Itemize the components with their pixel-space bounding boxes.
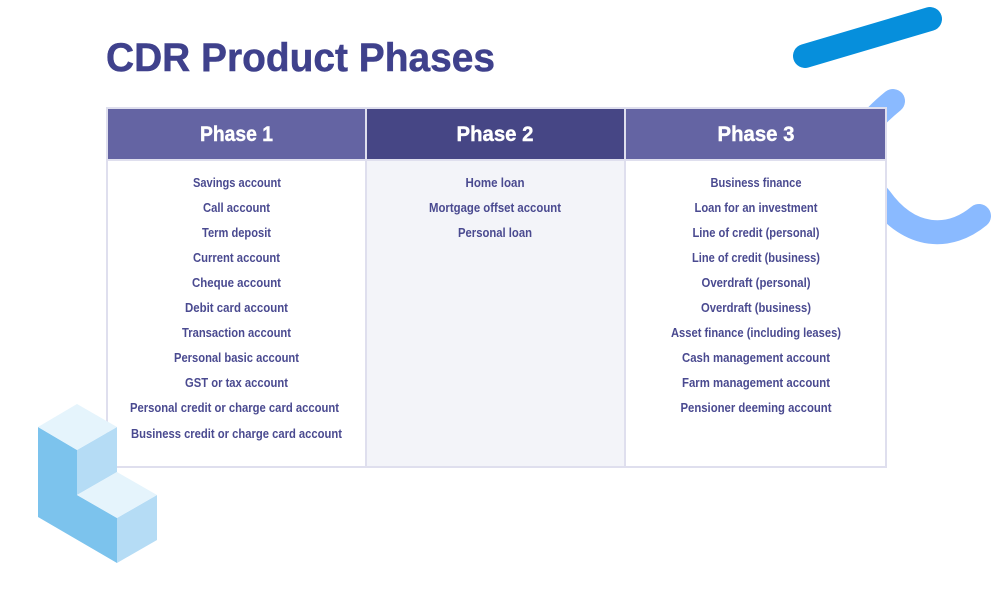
phase 3 product list: Line of credit (business) [692, 251, 820, 265]
phase 3 product list: Overdraft (business) [701, 301, 811, 315]
phase 3 product list: Pensioner deeming account [680, 401, 832, 415]
phase 3 product list: Asset finance (including leases) [671, 326, 841, 340]
panel: phase 2 column [366, 108, 625, 467]
phase 2 header [366, 108, 625, 160]
phase 1 product list: Savings account [193, 176, 282, 190]
phase 1 product list: Current account [193, 251, 281, 265]
phase 1 header [107, 108, 366, 160]
phase 1 product list: Cheque account [192, 276, 282, 290]
phase 2 product list: Mortgage offset account [429, 201, 562, 215]
phase 2 product list [429, 176, 562, 240]
phase 3 product list [671, 176, 841, 415]
decoration: light blue curved stroke behind table [857, 101, 979, 232]
phase 2 product list: Personal loan [458, 226, 532, 240]
phase 3 product list: Cash management account [682, 351, 831, 365]
table grid lines [107, 108, 886, 467]
phase 1 product list: Personal credit or charge card account [130, 401, 340, 415]
phase 1 product list: Debit card account [185, 301, 289, 315]
phase 1 header: Phase 1 [200, 123, 273, 146]
phase 3 product list: Line of credit (personal) [692, 226, 820, 240]
phase 1 product list: Term deposit [202, 226, 272, 240]
phase 3 header: Phase 3 [718, 123, 794, 146]
table [107, 108, 886, 467]
phase 3 product list: Business finance [710, 176, 802, 190]
phase 1 product list: Call account [203, 201, 271, 215]
phase 3 product list: Loan for an investment [694, 201, 818, 215]
phase 1 product list: GST or tax account [185, 376, 289, 390]
phase 1 product list: Business credit or charge card account [131, 427, 343, 441]
phase 1 product list: Transaction account [182, 326, 292, 340]
phase 3 header [625, 108, 886, 160]
phase 1 product list [130, 176, 343, 441]
decoration: blue diagonal stroke [805, 19, 930, 56]
phase 3 product list: Overdraft (personal) [702, 276, 810, 290]
title: CDR Product Phases [106, 36, 495, 80]
panel: phase 1 column [107, 108, 366, 467]
phase 2 product list: Home loan [466, 176, 524, 190]
phase 2 header: Phase 2 [456, 123, 534, 146]
panel: phase 3 column [625, 108, 886, 467]
phase 1 product list: Personal basic account [174, 351, 300, 365]
icon: isometric blue blocks [38, 404, 157, 563]
phase 3 product list: Farm management account [682, 376, 831, 390]
